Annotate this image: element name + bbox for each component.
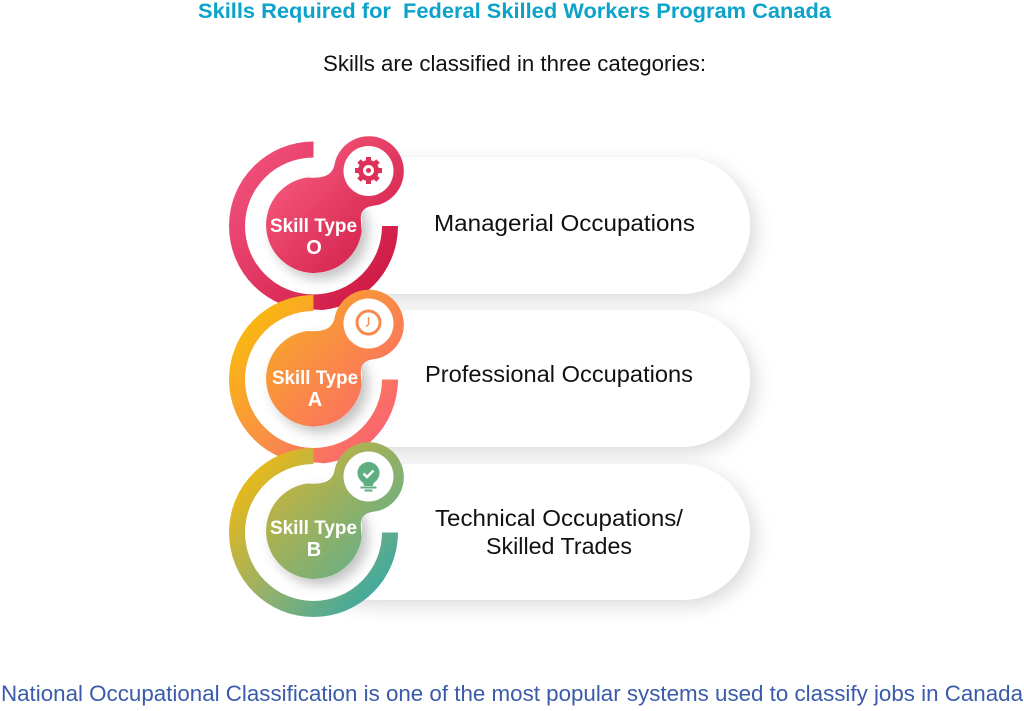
subtitle: Skills are classified in three categories: — [323, 51, 706, 76]
title: Skills Required for Federal Skilled Workers Program Canada — [198, 0, 831, 23]
pill: managerial occupations — [300, 157, 750, 294]
badge letter: O — [306, 237, 322, 259]
badge label: Skill Type — [272, 367, 358, 389]
pill: professional occupations — [300, 310, 750, 447]
panel: skill type B — [229, 442, 750, 617]
badge: skill type A — [266, 290, 404, 426]
pill label: Skilled Trades — [486, 533, 632, 559]
badge letter: A — [308, 389, 322, 411]
ring: skill type O — [229, 142, 398, 310]
badge letter: B — [307, 539, 321, 561]
ring: skill type A — [229, 295, 398, 464]
pill label: Professional Occupations — [425, 361, 693, 387]
badge: skill type O — [266, 136, 404, 273]
badge label: Skill Type — [270, 215, 357, 237]
ring: skill type B — [229, 448, 398, 617]
icon: light bulb with check — [344, 452, 394, 502]
panel: skill type O — [229, 136, 750, 310]
pill label: Technical Occupations/ — [435, 505, 684, 531]
panel: skill type A — [229, 290, 750, 464]
pill label — [435, 505, 684, 559]
badge label: Skill Type — [270, 517, 357, 539]
badge: skill type B — [266, 442, 404, 579]
icon: clock — [344, 298, 394, 348]
pill: technical occupations — [300, 464, 750, 600]
pill label: Managerial Occupations — [434, 210, 695, 236]
icon: gear — [344, 146, 394, 196]
footer note: National Occupational Classification is one of the most popular systems used to classify jobs in Canada — [1, 681, 1024, 706]
